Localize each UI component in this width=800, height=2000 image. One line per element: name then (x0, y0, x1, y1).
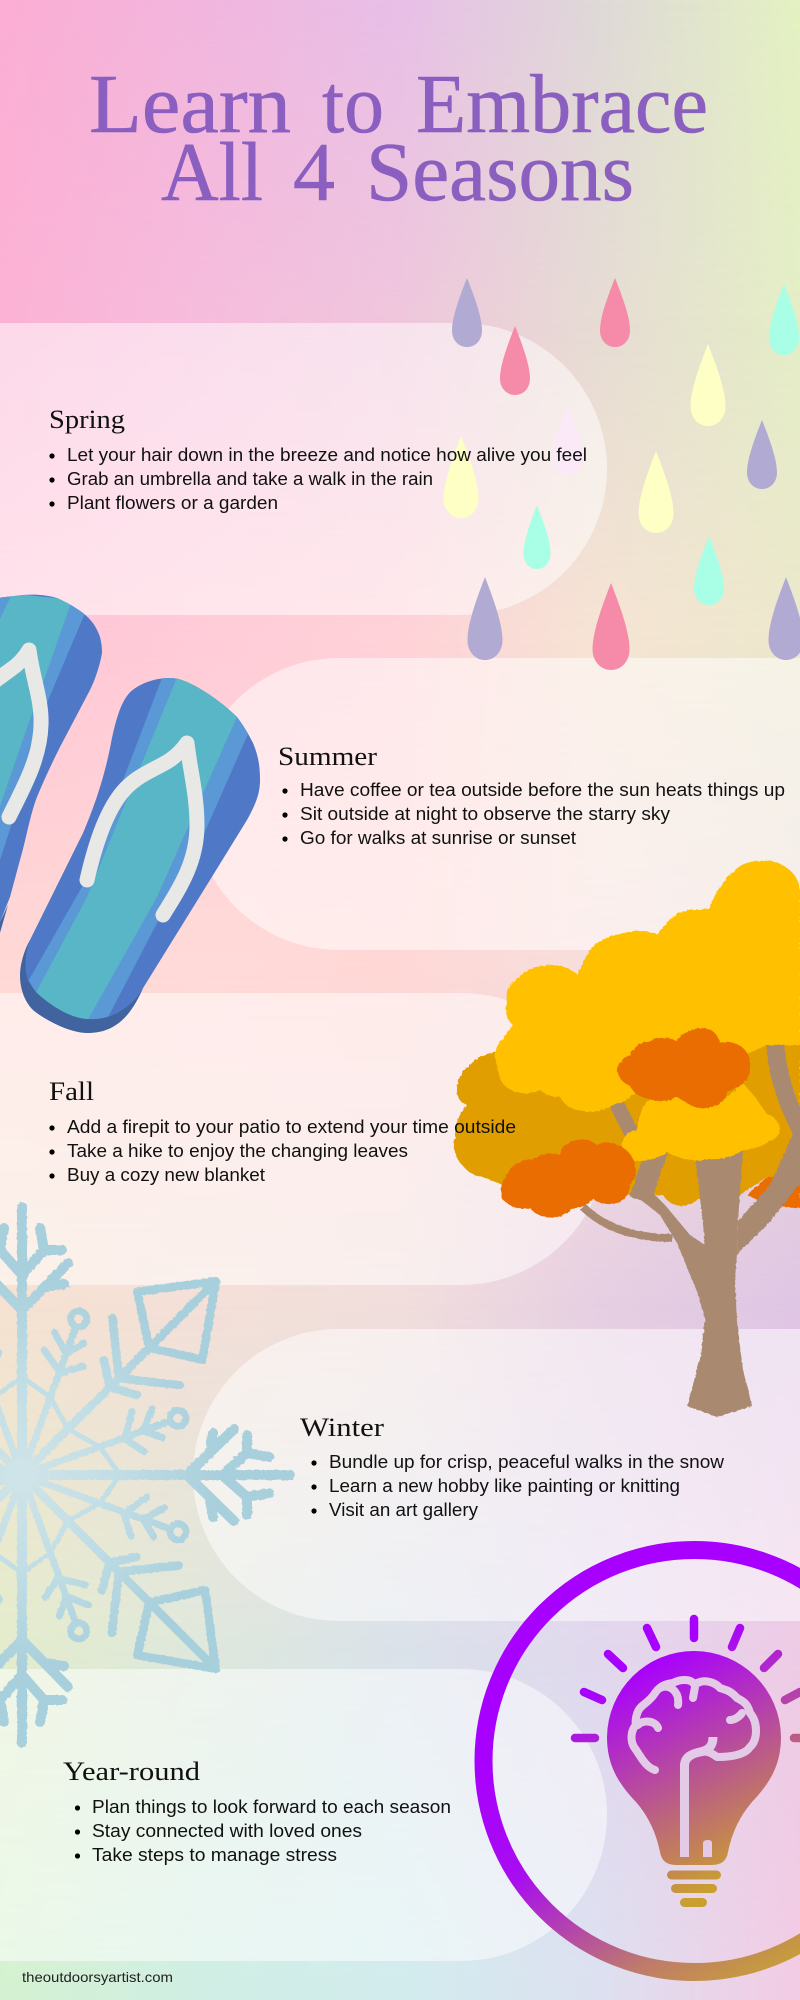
text block: fall (49, 1077, 516, 1185)
ring (484, 1550, 800, 1972)
heading: year-round: Year-round (63, 1757, 200, 1786)
footer: website: theoutdoorsyartist.com (22, 1969, 173, 1985)
list: fall: Buy a cozy new blanket (67, 1164, 265, 1185)
heading: winter: Winter (300, 1413, 384, 1442)
list: summer (282, 779, 785, 848)
text block: spring (49, 405, 587, 513)
list: year-round: Plan things to look forward to each season (92, 1796, 451, 1817)
list: year-round: Take steps to manage stress (92, 1844, 337, 1865)
right flip-flop (20, 678, 260, 1033)
list: spring: Grab an umbrella and take a walk in the rain (67, 468, 433, 489)
text block: year-round (63, 1757, 451, 1865)
text block: summer (278, 742, 785, 848)
list: spring: Let your hair down in the breeze and notice how alive you feel (67, 444, 587, 465)
panel: fall (0, 993, 607, 1285)
light rays (575, 1619, 800, 1738)
panel: winter (193, 1329, 800, 1621)
title (89, 58, 708, 219)
brain (632, 1680, 756, 1857)
bulb base (667, 1870, 721, 1907)
icon: autumn tree (454, 861, 800, 1417)
text block: winter (300, 1413, 725, 1520)
title: Embrace (416, 58, 708, 151)
list: fall: Take a hike to enjoy the changing leaves (67, 1140, 408, 1161)
list: year-round (75, 1796, 451, 1865)
orange leaves top (617, 1028, 750, 1108)
icon: lightbulb in ring (484, 1550, 800, 1972)
title: to (322, 58, 384, 151)
list: summer: Have coffee or tea outside before the sun heats things up (300, 779, 785, 800)
icon: snowflake (0, 1207, 290, 1743)
snowflake ring arms (0, 1304, 193, 1646)
icon: flip-flops (0, 594, 260, 1033)
tree back foliage (454, 1040, 800, 1206)
tree main foliage (495, 861, 800, 1112)
panel: year-round (0, 1669, 607, 1961)
snowflake long arms (0, 1207, 290, 1743)
list: spring (49, 444, 587, 513)
title: Seasons (366, 126, 634, 219)
title: All (161, 126, 263, 219)
heading: summer: Summer (278, 742, 377, 771)
list: year-round: Stay connected with loved ones (92, 1820, 362, 1841)
list: fall: Add a firepit to your patio to extend your time outside (67, 1116, 516, 1137)
heading: fall: Fall (49, 1077, 94, 1106)
title: 4 (293, 126, 335, 219)
list: fall (49, 1116, 516, 1185)
list: spring: Plant flowers or a garden (67, 492, 278, 513)
orange leaves right (747, 1175, 800, 1208)
list: summer: Go for walks at sunrise or sunset (300, 827, 576, 848)
list: winter: Bundle up for crisp, peaceful walks in the snow (329, 1451, 725, 1472)
list: winter: Visit an art gallery (329, 1499, 479, 1520)
tree trunk and branches (583, 1040, 800, 1417)
tree lower yellow foliage (622, 1083, 780, 1161)
panel: summer (193, 658, 800, 950)
list: winter: Learn a new hobby like painting or knitting (329, 1475, 680, 1496)
list: summer: Sit outside at night to observe the starry sky (300, 803, 671, 824)
orange leaves lower (501, 1139, 636, 1217)
heading: spring: Spring (49, 405, 125, 434)
bulb (607, 1651, 781, 1865)
panel: spring (0, 323, 607, 615)
title: Learn (89, 58, 291, 151)
icon: raindrops (444, 278, 800, 670)
list: winter (311, 1451, 725, 1520)
snowflake inner web (0, 1377, 120, 1573)
left flip-flop (0, 594, 102, 932)
snowflake kite arms (0, 1247, 250, 1703)
